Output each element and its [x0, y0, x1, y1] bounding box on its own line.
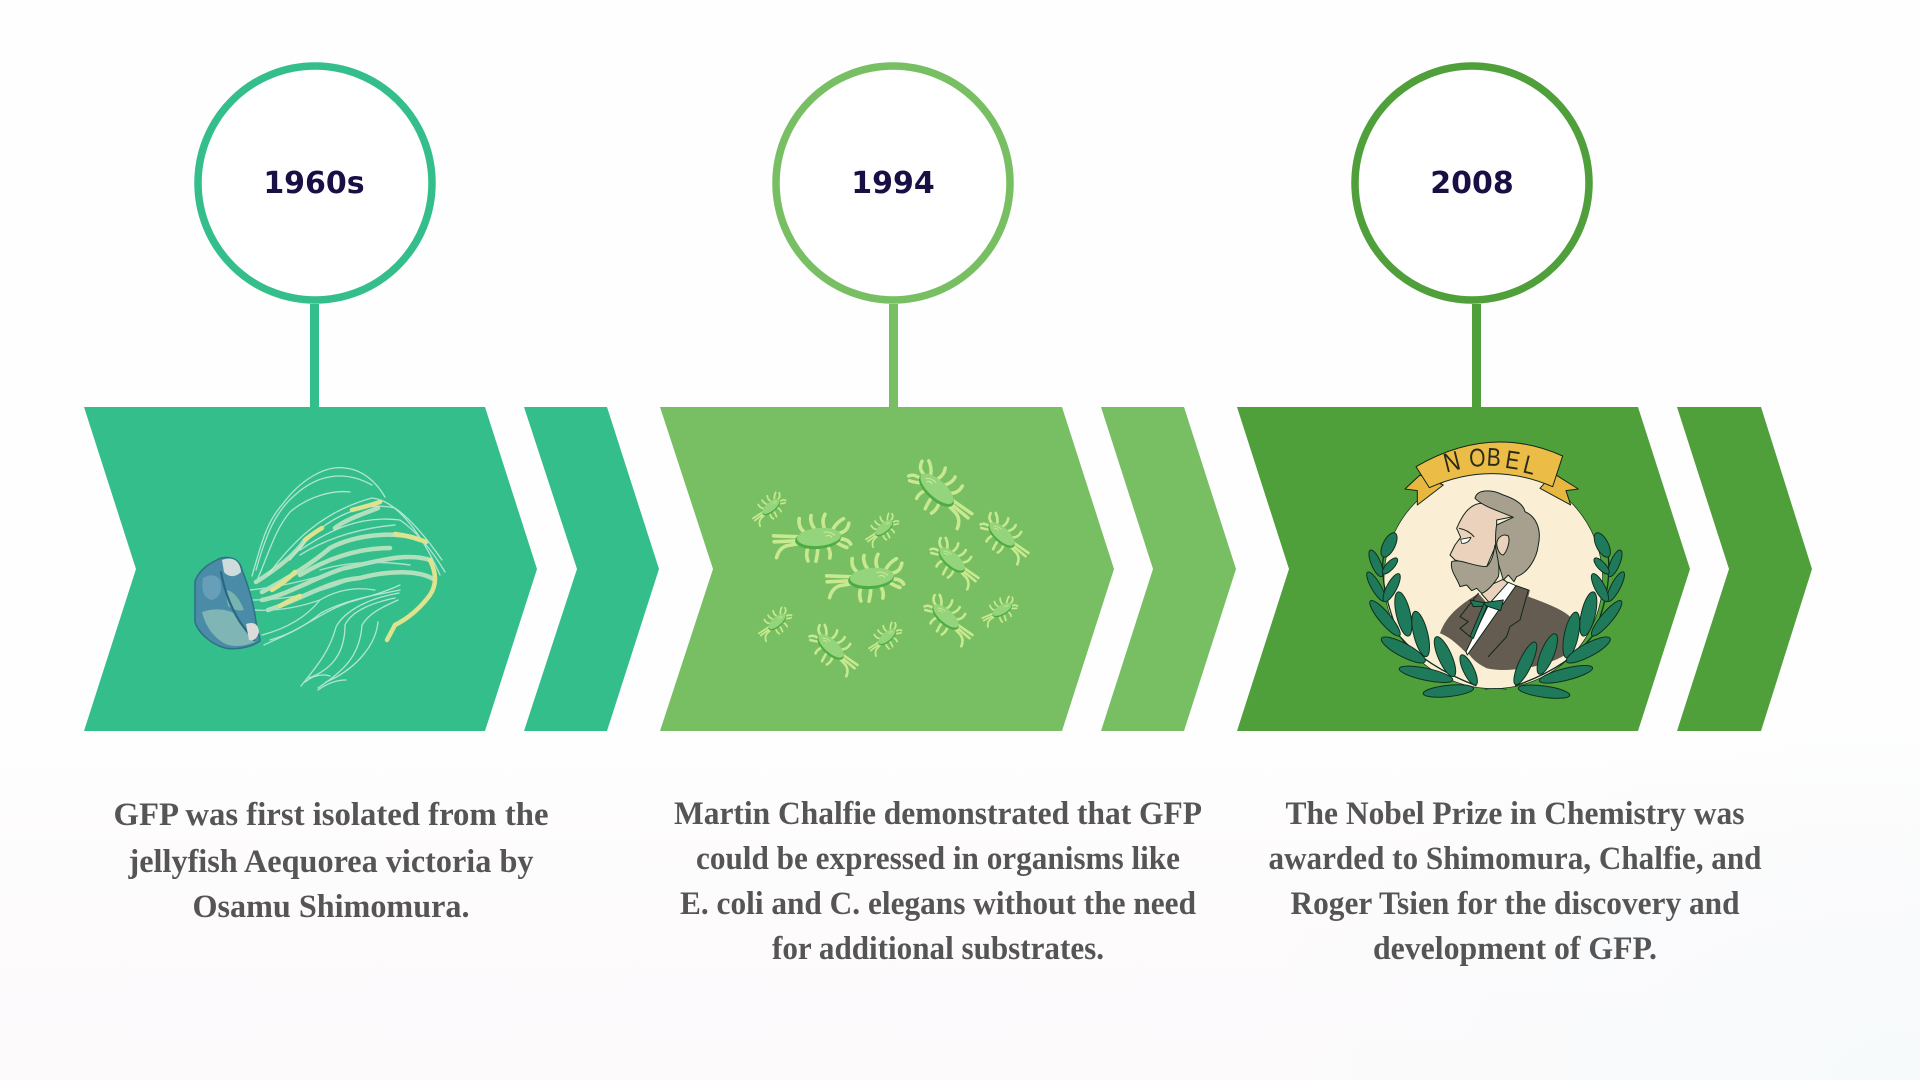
small chevron: [1677, 407, 1812, 731]
panel: 1994: [660, 66, 1236, 967]
description: 2008: The Nobel Prize in Chemistry was: [1286, 796, 1745, 832]
icon: Nobel medal portrait: E: [1504, 445, 1522, 475]
description: 2008: Roger Tsien for the discovery and: [1290, 886, 1740, 922]
small chevron: [1101, 407, 1236, 731]
description: 1960s: jellyfish Aequorea victoria by: [128, 844, 534, 880]
year circle: 2008: [1355, 66, 1589, 300]
icon: Nobel medal portrait: O: [1468, 443, 1486, 472]
large chevron: [84, 407, 537, 731]
icon: Nobel medal portrait: L: [1521, 450, 1539, 480]
panel: 2008: [1237, 66, 1812, 967]
description: 2008: awarded to Shimomura, Chalfie, and: [1268, 841, 1762, 877]
icon: Nobel medal portrait: N: [1441, 446, 1463, 479]
description: 2008: development of GFP.: [1373, 931, 1657, 967]
description: 2008: [1268, 796, 1762, 967]
icon: bacteria: [748, 453, 1037, 681]
small chevron: [524, 407, 659, 731]
connector line: [310, 304, 319, 408]
large chevron: [660, 407, 1114, 731]
year circle: 1994: 1994: [851, 166, 935, 201]
description: 1960s: [114, 797, 548, 925]
description: 1960s: GFP was first isolated from the: [114, 797, 548, 833]
year circle: 2008: 2008: [1430, 166, 1514, 201]
year circle: 1960s: 1960s: [263, 166, 365, 201]
description: 1994: E. coli and C. elegans without the need: [680, 886, 1196, 922]
description: 1994: for additional substrates.: [772, 931, 1104, 967]
icon: Nobel medal portrait: [1364, 442, 1628, 701]
year circle: 1994: [776, 66, 1010, 300]
icon: Nobel medal portrait: B: [1486, 442, 1502, 472]
description: 1994: [674, 796, 1202, 967]
panel: 1960s: [84, 66, 659, 925]
connector line: [1472, 304, 1481, 408]
icon: jellyfish: [195, 468, 445, 690]
description: 1994: could be expressed in organisms like: [696, 841, 1180, 877]
connector line: [889, 304, 898, 408]
description: 1960s: Osamu Shimomura.: [192, 889, 470, 925]
large chevron: [1237, 407, 1690, 731]
description: 1994: Martin Chalfie demonstrated that GFP: [674, 796, 1202, 832]
year circle: 1960s: [198, 66, 432, 300]
